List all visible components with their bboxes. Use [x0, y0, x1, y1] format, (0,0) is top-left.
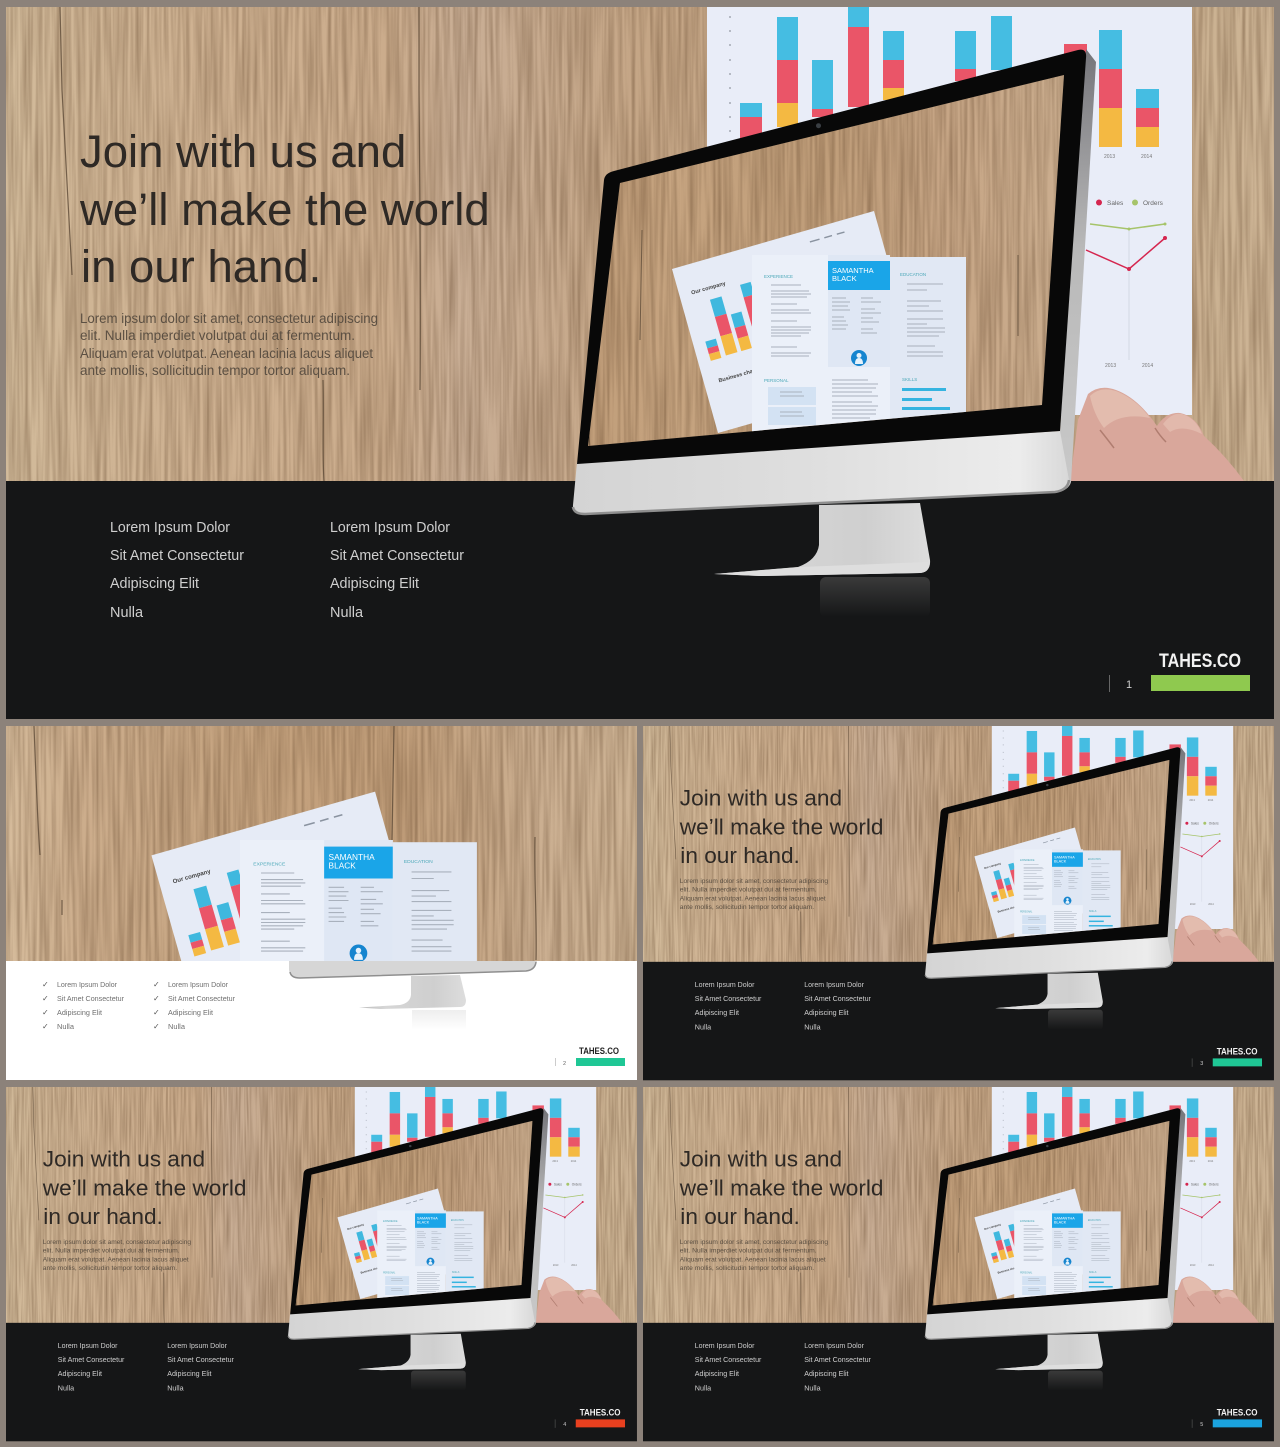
heading: Join with us and	[43, 1147, 205, 1172]
list column 2: Sit Amet Consectetur	[804, 994, 871, 1003]
monitor chin and stand	[289, 961, 537, 1030]
brand and page number: TAHES.CO	[1159, 651, 1241, 672]
dark footer band	[643, 1323, 1274, 1441]
list column 2: Sit Amet Consectetur	[167, 1355, 234, 1364]
list column 2: Sit Amet Consectetur	[804, 1355, 871, 1364]
list column 2 with checkmarks: ✓	[153, 1008, 160, 1017]
dark footer band	[6, 481, 1274, 719]
list column 1 with checkmarks: Lorem Ipsum Dolor	[57, 980, 118, 989]
brand and page number: 4	[563, 1422, 566, 1428]
body text: Aliquam erat volutpat. Aenean lacinia lacus aliquet	[680, 1257, 826, 1264]
chart paper	[992, 1087, 1233, 1290]
chart paper with stacked bars and line chart	[707, 7, 1192, 415]
wood background	[643, 726, 1274, 962]
chart paper	[992, 726, 1233, 929]
list column 2: Adipiscing Elit	[330, 576, 419, 592]
list column 1: Lorem Ipsum Dolor	[695, 1341, 755, 1350]
list column 2: Nulla	[167, 1384, 184, 1393]
heading: Join with us and	[680, 1147, 842, 1172]
list column 1: Nulla	[695, 1384, 711, 1393]
heading	[679, 786, 884, 868]
brand and page number: 1	[1126, 679, 1132, 691]
list column 1 with checkmarks	[42, 980, 125, 1031]
brand and page number: 5	[1200, 1422, 1203, 1428]
list column 2 with checkmarks	[153, 980, 236, 1031]
list column 1: Sit Amet Consectetur	[58, 1355, 125, 1364]
list column 2	[804, 980, 871, 1032]
slide 1: large main slide	[6, 7, 1274, 719]
wood background	[6, 1087, 637, 1323]
list column 1: Lorem Ipsum Dolor	[58, 1341, 118, 1350]
body text: ante mollis, sollicitudin tempor tortor aliquam.	[43, 1265, 177, 1272]
brand and page number	[555, 1407, 625, 1428]
list column 1	[695, 980, 762, 1032]
list column 1 with checkmarks: Nulla	[57, 1022, 75, 1031]
list column 2: Nulla	[330, 605, 364, 621]
hand photo	[1172, 915, 1259, 962]
heading: we’ll make the world	[79, 184, 490, 235]
body text: Aliquam erat volutpat. Aenean lacinia lacus aliquet	[680, 896, 826, 903]
list column 2: Nulla	[804, 1384, 821, 1393]
brand and page number: TAHES.CO	[579, 1046, 619, 1057]
body text	[80, 311, 378, 378]
hand photo	[1070, 388, 1244, 481]
list column 2	[330, 520, 464, 621]
list column 1: Lorem Ipsum Dolor	[695, 980, 755, 989]
slide 3: dark variant with teal accent	[643, 726, 1274, 1080]
body text	[680, 1239, 828, 1272]
heading: we’ll make the world	[679, 814, 884, 839]
list column 2: Nulla	[804, 1023, 821, 1032]
list column 1	[695, 1341, 762, 1393]
list column 2 with checkmarks: Lorem Ipsum Dolor	[168, 980, 229, 989]
body text: Lorem ipsum dolor sit amet, consectetur adipiscing	[680, 878, 828, 885]
body text: ante mollis, sollicitudin tempor tortor aliquam.	[680, 904, 814, 911]
list column 2: Lorem Ipsum Dolor	[167, 1341, 228, 1350]
list column 2 with checkmarks: ✓	[153, 1022, 160, 1031]
list column 2: Lorem Ipsum Dolor	[804, 1341, 865, 1350]
slide 4: dark variant with red accent	[6, 1087, 637, 1441]
body text: Aliquam erat volutpat. Aenean lacinia lacus aliquet	[80, 346, 373, 361]
monitor mockup	[925, 1108, 1185, 1391]
wood background	[643, 1087, 1274, 1323]
list column 1: Nulla	[58, 1384, 74, 1393]
list column 1 with checkmarks: ✓	[42, 1022, 49, 1031]
heading: Join with us and	[680, 786, 842, 811]
list column 1	[58, 1341, 125, 1393]
body text: ante mollis, sollicitudin tempor tortor aliquam.	[680, 1265, 814, 1272]
heading: we’ll make the world	[679, 1175, 884, 1200]
list column 2	[804, 1341, 871, 1393]
slide 5: dark variant with blue accent	[643, 1087, 1274, 1441]
heading: Join with us and	[80, 126, 406, 177]
heading	[42, 1147, 247, 1229]
body text: Lorem ipsum dolor sit amet, consectetur adipiscing	[80, 311, 378, 326]
list column 1: Adipiscing Elit	[695, 1369, 739, 1378]
list column 2: Adipiscing Elit	[804, 1008, 849, 1017]
slide 2: white variant with papers	[6, 726, 637, 1080]
list column 1 with checkmarks: ✓	[42, 994, 49, 1003]
list column 2: Lorem Ipsum Dolor	[804, 980, 865, 989]
heading: in our hand.	[81, 241, 321, 292]
brand and page number	[555, 1046, 625, 1067]
heading: in our hand.	[43, 1204, 163, 1229]
brand and page number: TAHES.CO	[1217, 1046, 1258, 1057]
heading: in our hand.	[680, 843, 800, 868]
list column 2 with checkmarks: Adipiscing Elit	[168, 1008, 213, 1017]
list column 2: Adipiscing Elit	[804, 1369, 849, 1378]
body text: elit. Nulla imperdiet volutpat dui at fermentum.	[680, 1248, 817, 1255]
list column 1: Sit Amet Consectetur	[695, 994, 762, 1003]
brand and page number: TAHES.CO	[1217, 1407, 1258, 1418]
body text	[680, 878, 828, 911]
list column 1: Nulla	[110, 605, 144, 621]
monitor mockup	[573, 49, 1096, 617]
list column 2: Sit Amet Consectetur	[330, 548, 464, 564]
body text	[43, 1239, 191, 1272]
hand photo	[535, 1276, 622, 1323]
list column 2 with checkmarks: Sit Amet Consectetur	[168, 994, 236, 1003]
list column 1: Sit Amet Consectetur	[110, 548, 244, 564]
brand and page number: 3	[1200, 1061, 1203, 1067]
brand and page number: 2	[563, 1061, 566, 1067]
papers on desk	[152, 792, 477, 961]
monitor mockup	[925, 747, 1185, 1030]
list column 1: Nulla	[695, 1023, 711, 1032]
list column 1: Sit Amet Consectetur	[695, 1355, 762, 1364]
white lower panel	[6, 961, 637, 1080]
body text: elit. Nulla imperdiet volutpat dui at fermentum.	[80, 328, 355, 343]
heading	[80, 134, 487, 282]
list column 1: Lorem Ipsum Dolor	[110, 520, 230, 536]
chart paper	[355, 1087, 596, 1290]
body text: elit. Nulla imperdiet volutpat dui at fermentum.	[43, 1248, 180, 1255]
brand and page number	[1192, 1407, 1262, 1428]
list column 2: Adipiscing Elit	[167, 1369, 212, 1378]
dark footer band	[6, 1323, 637, 1441]
heading: in our hand.	[680, 1204, 800, 1229]
heading: we’ll make the world	[42, 1175, 247, 1200]
list column 1: Adipiscing Elit	[110, 576, 199, 592]
list column 1 with checkmarks: ✓	[42, 980, 49, 989]
list column 1 with checkmarks: Sit Amet Consectetur	[57, 994, 125, 1003]
body text: elit. Nulla imperdiet volutpat dui at fermentum.	[680, 887, 817, 894]
body text: Lorem ipsum dolor sit amet, consectetur adipiscing	[43, 1239, 191, 1246]
monitor mockup	[288, 1108, 548, 1391]
list column 2	[167, 1341, 234, 1393]
list column 1: Adipiscing Elit	[58, 1369, 102, 1378]
list column 1 with checkmarks: Adipiscing Elit	[57, 1008, 102, 1017]
body text: Aliquam erat volutpat. Aenean lacinia lacus aliquet	[43, 1257, 189, 1264]
brand and page number	[1192, 1046, 1262, 1067]
list column 1	[110, 520, 244, 621]
list column 2 with checkmarks: Nulla	[168, 1022, 186, 1031]
body text: Lorem ipsum dolor sit amet, consectetur adipiscing	[680, 1239, 828, 1246]
list column 2 with checkmarks: ✓	[153, 980, 160, 989]
brand and page number	[1109, 651, 1250, 692]
brand and page number: TAHES.CO	[580, 1407, 621, 1418]
wood background	[6, 7, 1274, 481]
list column 1 with checkmarks: ✓	[42, 1008, 49, 1017]
wood background	[6, 726, 637, 961]
list column 2 with checkmarks: ✓	[153, 994, 160, 1003]
body text: ante mollis, sollicitudin tempor tortor aliquam.	[80, 363, 350, 378]
heading	[679, 1147, 884, 1229]
hand photo	[1172, 1276, 1259, 1323]
dark footer band	[643, 962, 1274, 1080]
list column 1: Adipiscing Elit	[695, 1008, 739, 1017]
list column 2: Lorem Ipsum Dolor	[330, 520, 450, 536]
